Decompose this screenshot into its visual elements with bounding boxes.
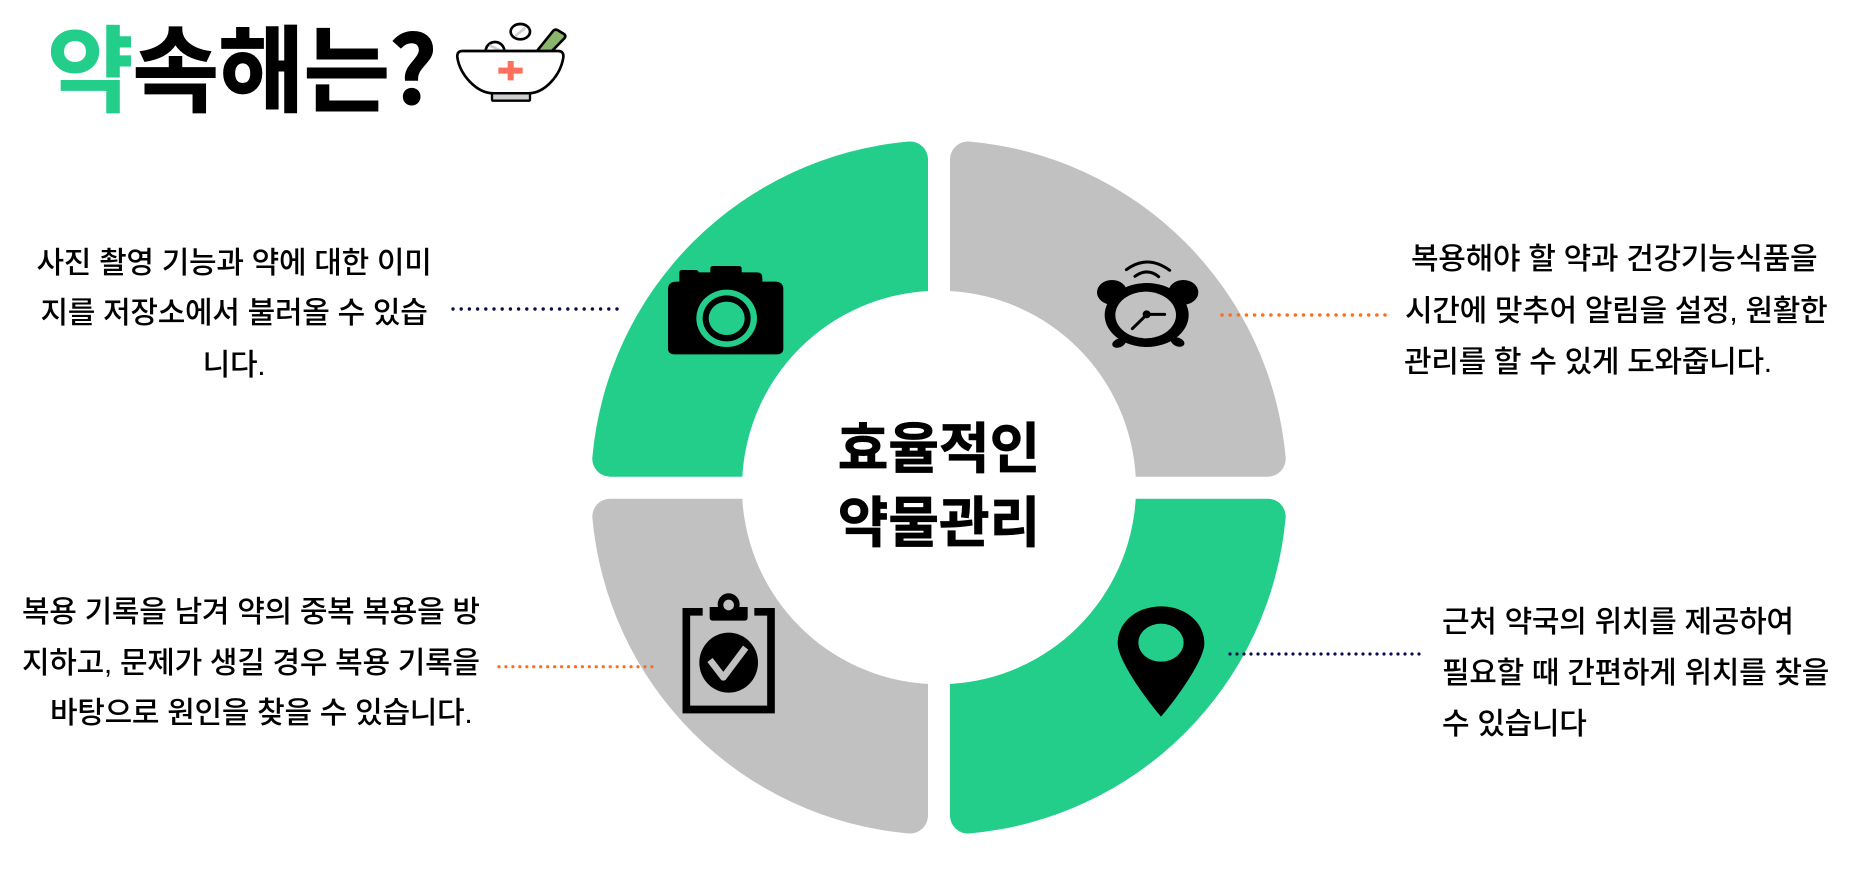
text block: bottom-right description xyxy=(1442,606,1829,741)
text block: top-left description: 니다. xyxy=(203,349,265,382)
panel: bottom-right green sector xyxy=(950,499,1286,834)
text block: top-right description xyxy=(1404,243,1827,379)
panel: top-right grey sector xyxy=(950,141,1286,477)
icon: mortar and pestle xyxy=(457,24,565,101)
text block: bottom-left description: 바탕으로 원인을 찾을 수 있습니다. xyxy=(50,697,472,730)
icon: clipboard with check xyxy=(686,593,771,709)
text block: bottom-left description: 복용 기록을 남겨 약의 중복 복용을 방 xyxy=(22,596,480,629)
text block: top-right description: 관리를 할 수 있게 도와줍니다. xyxy=(1404,346,1772,379)
text block: bottom-right description: 근처 약국의 위치를 제공하여 xyxy=(1442,606,1794,639)
text block: top-right description: 복용해야 할 약과 건강기능식품을 xyxy=(1411,243,1817,276)
text block: top-right description: 시간에 맞추어 알림을 설정, 원활한 xyxy=(1405,295,1827,328)
text block: bottom-right description: 수 있습니다 xyxy=(1442,708,1587,741)
text block: top-left description: 지를 저장소에서 불러올 수 있습 xyxy=(40,297,428,330)
heading: center label xyxy=(838,404,1040,558)
text block: bottom-left description: 지하고, 문제가 생길 경우 복용 기록을 xyxy=(22,647,480,680)
icon: location pin xyxy=(1118,606,1204,717)
text block: top-left description xyxy=(36,247,432,382)
heading: center label: 약물관리 xyxy=(838,478,1040,558)
text block: bottom-right description: 필요할 때 간편하게 위치를 찾을 xyxy=(1442,657,1829,690)
heading: center label: 효율적인 xyxy=(838,404,1040,484)
connector: bottom-right navy dots xyxy=(1230,652,1420,656)
icon: alarm clock xyxy=(1097,262,1198,349)
panel: bottom-left grey sector xyxy=(592,499,928,834)
text block: top-left description: 사진 촬영 기능과 약에 대한 이미 xyxy=(36,247,432,280)
icon: camera xyxy=(668,266,783,354)
panel: top-left green sector xyxy=(592,141,928,477)
connector: bottom-left orange dots xyxy=(499,665,652,668)
connector: top-right orange dots xyxy=(1222,313,1388,317)
title: 약속해는? xyxy=(47,0,436,132)
connector: top-left navy dots xyxy=(453,307,620,311)
text block: bottom-left description xyxy=(22,596,480,730)
